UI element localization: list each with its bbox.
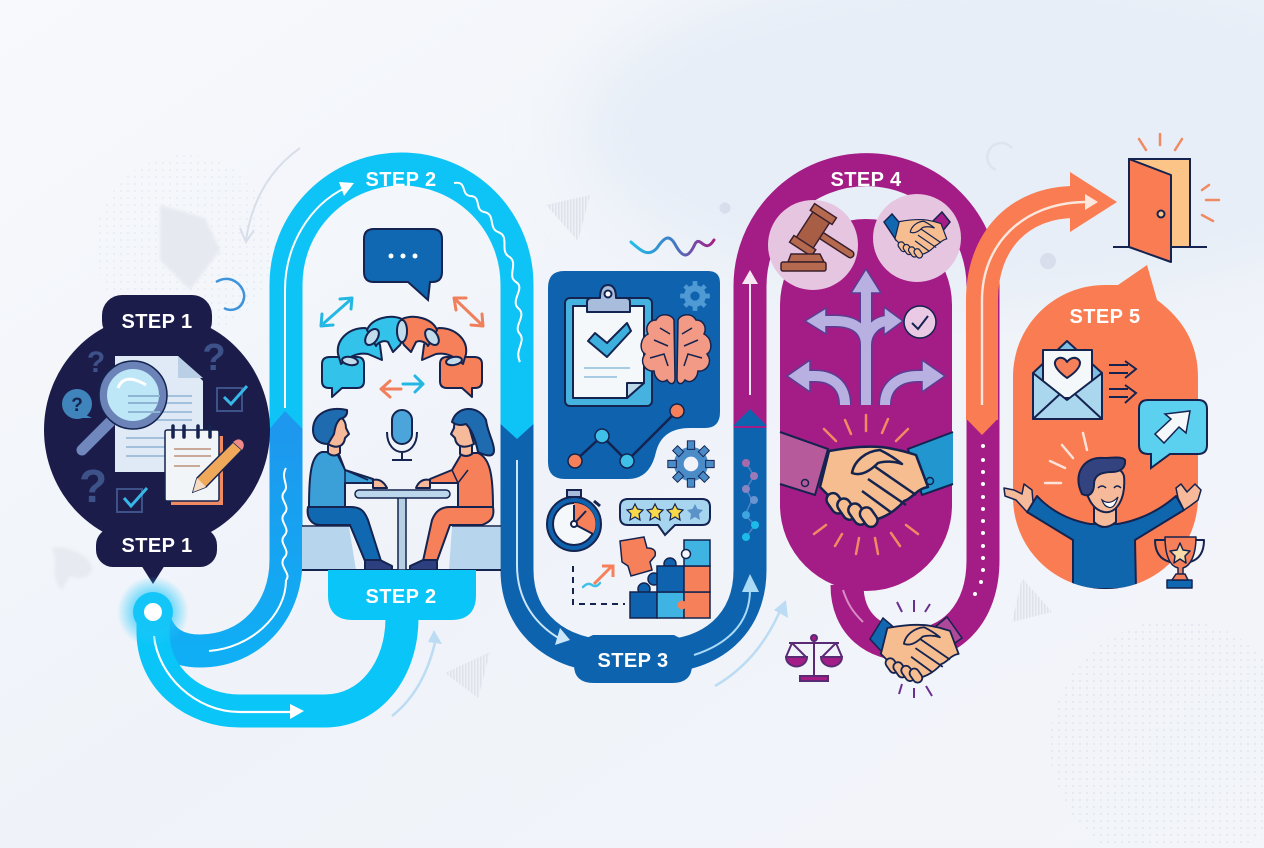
icon: dashed route and rising arrow [573, 566, 625, 604]
icons: double arrows [321, 298, 483, 326]
icon: speech bubble [364, 229, 442, 300]
icon: lower handshake [870, 600, 962, 698]
icon: chain of dialogue bubbles [322, 317, 482, 397]
step 5 heading: STEP 5 [1070, 306, 1140, 328]
ribbon: step 4 magenta loop [733, 170, 985, 645]
step 3 tab: STEP 3 [598, 650, 668, 672]
icons: question marks: ? [87, 346, 105, 379]
panel: step 3 blue card [548, 271, 720, 479]
illustration: woman seated [410, 409, 494, 570]
icon: magnifying glass [82, 361, 167, 450]
ribbon: upper route from start to arch [155, 410, 302, 651]
icon: share bubble [1139, 400, 1207, 468]
icon: love letter [1033, 341, 1102, 419]
panel: step 4 pill [768, 169, 961, 591]
icon: small gear [680, 281, 710, 311]
icon: scales [786, 635, 842, 681]
panel: step 5 pill [1004, 265, 1207, 589]
icon: large handshake [780, 415, 953, 554]
step 1 bottom tab [96, 528, 217, 584]
icon: gavel circle [768, 200, 866, 290]
icon: celebrating person [1004, 433, 1201, 589]
icon: crossroad arrows [787, 269, 945, 405]
ribbon: step 2 arch [270, 169, 534, 439]
illustration: man seated [308, 409, 392, 570]
icons: check boxes [117, 386, 247, 512]
illustration: benches and floor [302, 526, 501, 570]
icon: large gear [668, 441, 714, 487]
line chart [568, 404, 684, 468]
icon: clipboard [565, 285, 652, 406]
step 2 heading: STEP 2 [366, 169, 436, 191]
step 3 tab [574, 635, 692, 683]
icon: puzzle [620, 537, 710, 618]
icon: stopwatch [547, 490, 601, 551]
step 1 circle panel [44, 295, 270, 584]
step 4 heading: STEP 4 [831, 169, 902, 191]
icon: document [115, 356, 203, 472]
start node [117, 576, 189, 648]
icon: exchange arrows [381, 376, 423, 397]
icon: star rating bubble [620, 499, 710, 535]
icon: question bubble: ? [71, 395, 83, 416]
icons: question marks: ? [202, 337, 226, 379]
step 2 tab: STEP 2 [366, 586, 436, 608]
icon: question bubble [62, 389, 92, 419]
icon: handshake circle [873, 194, 961, 282]
icon: brain [641, 315, 711, 384]
decorative shapes [52, 143, 1056, 716]
icons: question marks [79, 337, 226, 512]
step 1 bottom tab: STEP 1 [122, 535, 192, 557]
ribbon: lower route from start to step 2 [153, 615, 402, 719]
step 2 tab [328, 570, 476, 620]
icons: question marks: ? [79, 460, 107, 512]
ribbon: step 3 route [517, 420, 759, 656]
ribbon: orange exit arrow [966, 172, 1117, 435]
icon: trophy [1155, 537, 1204, 588]
step 1 top tab [102, 295, 212, 341]
icon: open door [1113, 134, 1219, 262]
illustration: table [355, 490, 450, 570]
step 1 top tab: STEP 1 [122, 311, 192, 333]
icon: microphone [387, 410, 417, 460]
icon: check circle [904, 306, 936, 338]
icon: send arrows [1109, 361, 1136, 403]
decorative dot chain [742, 459, 759, 541]
icon: notepad and pencil [165, 426, 244, 505]
